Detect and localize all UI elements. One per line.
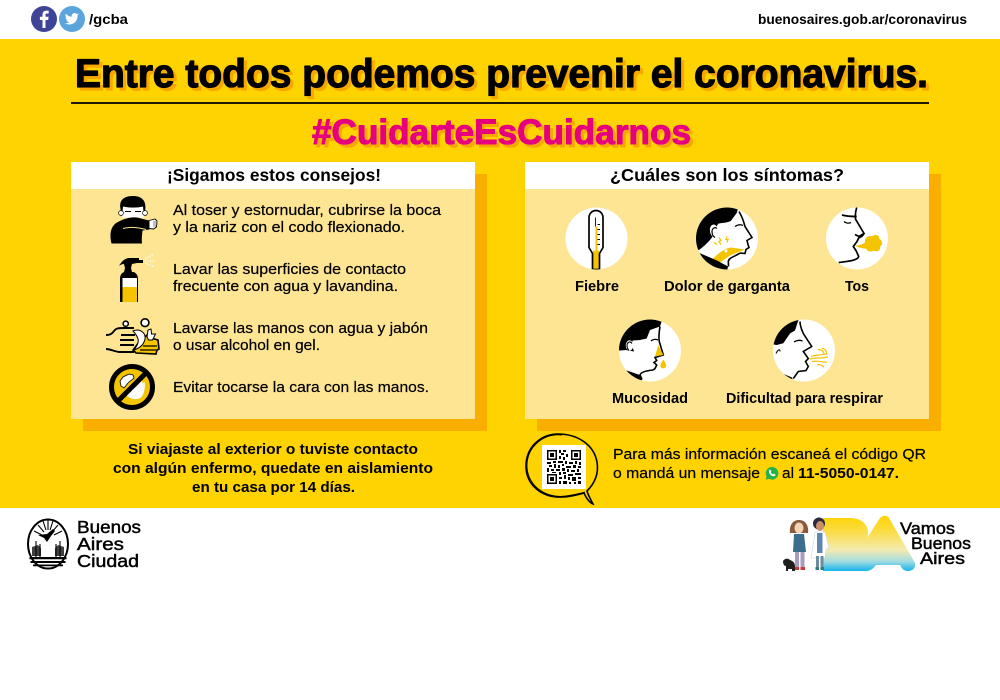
text block: mas informacion: o mandá un mensaje (613, 466, 760, 482)
logo: vamos buenos aires: Buenos (911, 535, 971, 553)
icon: coat of arms (28, 520, 68, 568)
text block: aislamiento: con algún enfermo, quedate en aislamiento (113, 460, 433, 477)
panel shadow (537, 174, 941, 431)
heading: sigamos estos consejos: ¡Sigamos estos consejos! (167, 165, 381, 185)
text: toser (173, 203, 442, 236)
panel: sintomas (525, 162, 941, 431)
icon: ba letters (823, 516, 915, 571)
text: lavarse (173, 321, 428, 354)
text: toser: y la nariz con el codo flexionado. (173, 220, 405, 236)
label: fiebre: Fiebre (575, 278, 619, 295)
icon: thermometer (566, 208, 628, 270)
logo: buenos aires ciudad: Buenos (77, 517, 141, 537)
text block: mas informacion (613, 447, 926, 482)
icon: washing hands (106, 319, 159, 354)
text: lavar: Lavar las superficies de contacto (173, 262, 406, 278)
logo: vamos buenos aires (783, 516, 971, 571)
qr code (542, 445, 586, 489)
label: dolor de garganta: Dolor de garganta (664, 278, 791, 295)
icon: twitter (59, 6, 85, 32)
icon: coughing into elbow (110, 196, 157, 244)
text: /gcba: /gcba (89, 11, 128, 27)
icon: runny nose (617, 318, 681, 384)
icon: spray bottle (119, 254, 155, 302)
text block: mas informacion: Para más información escaneá el código QR (613, 447, 926, 463)
panel header (71, 162, 475, 189)
panel header (525, 162, 929, 189)
heading: cuales son los sintomas: ¿Cuáles son los síntomas? (610, 165, 844, 185)
panel body (525, 162, 929, 419)
title: Entre todos podemos prevenir el coronavirus. (75, 52, 928, 96)
panel: consejos (71, 162, 487, 431)
label: dificultad para respirar: Dificultad para respirar (726, 390, 883, 407)
text: lavar (173, 262, 406, 295)
icon: cough (826, 208, 888, 270)
label: tos: Tos (845, 278, 869, 295)
yellow background band (0, 39, 1000, 508)
text block: aislamiento (113, 441, 433, 496)
icon: sore throat (694, 206, 758, 272)
hashtag: #CuidarteEsCuidarnos (312, 113, 691, 152)
social media header (31, 6, 128, 32)
logo: buenos aires ciudad (28, 517, 141, 571)
text block: aislamiento: Si viajaste al exterior o tuviste contacto (128, 441, 418, 458)
logo: vamos buenos aires: Aires (920, 550, 965, 568)
logo: buenos aires ciudad: Aires (77, 534, 124, 554)
panel shadow (83, 174, 487, 431)
icon: girl, doctor and dog (783, 518, 829, 571)
text: toser: Al toser y estornudar, cubrirse la boca (173, 203, 442, 219)
text block: mas informacion: al (782, 466, 794, 482)
text block: aislamiento: en tu casa por 14 días. (192, 479, 355, 496)
panel body (71, 162, 475, 419)
text: lavarse: Lavarse las manos con agua y jabón (173, 321, 428, 337)
icon: difficulty breathing (771, 318, 835, 384)
logo: vamos buenos aires: Vamos (900, 520, 955, 538)
icon: do not touch face (112, 366, 152, 408)
speech bubble with qr code (526, 434, 598, 504)
text block: mas informacion: 11-5050-0147. (798, 465, 899, 482)
text: lavarse: o usar alcohol en gel. (173, 338, 320, 354)
icon: whatsapp (766, 467, 778, 480)
label: mucosidad: Mucosidad (612, 390, 688, 407)
text: lavar: frecuente con agua y lavandina. (173, 279, 398, 295)
text: evitar: Evitar tocarse la cara con las manos. (173, 380, 429, 396)
logo: buenos aires ciudad: Ciudad (77, 551, 139, 571)
icon: facebook (31, 6, 57, 32)
website url: buenosaires.gob.ar/coronavirus (758, 11, 967, 27)
speech bubble outline (526, 434, 598, 504)
